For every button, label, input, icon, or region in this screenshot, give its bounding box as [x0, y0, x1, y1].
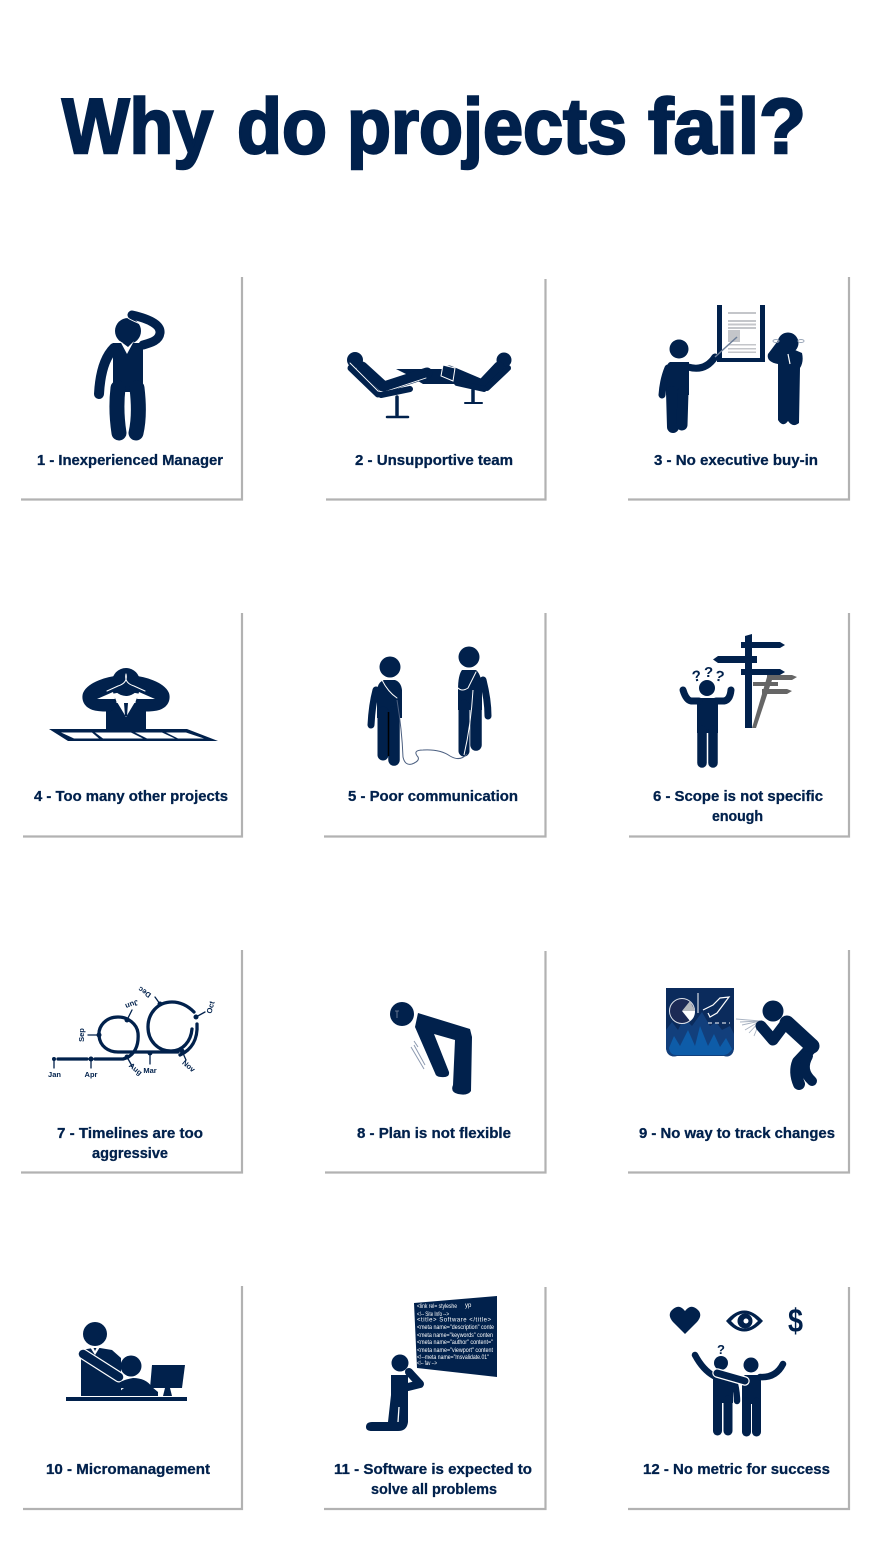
- icon: person kneeling before code screen: <!--meta name="msvalidate.01": [417, 1355, 489, 1361]
- icon: person kneeling before code screen: [366, 1296, 497, 1431]
- title: [62, 82, 806, 170]
- icon: looping timeline: Apr: [85, 1070, 98, 1079]
- label: 7 - Timelines are too: [57, 1125, 203, 1142]
- title: Why: [62, 82, 213, 170]
- icon: confused person at signpost: [683, 634, 797, 763]
- icon: person overwhelmed at desk: [49, 668, 218, 741]
- label: solve all problems: [371, 1481, 497, 1498]
- icon: dollar sign: $: [788, 1302, 803, 1339]
- icon: manager over shoulder of worker: [66, 1322, 187, 1401]
- icon: two people with arms up: ?: [717, 1342, 725, 1357]
- panel: 11 software expected to solve all problems: [324, 1287, 546, 1509]
- panel: 3 no executive buy-in: [628, 277, 849, 500]
- icon: person kneeling before code screen: <!-- fav -->: [417, 1361, 437, 1367]
- panel: 1 inexperienced manager: [21, 277, 242, 500]
- icon: two people reclining at a table: [347, 352, 512, 417]
- label: 12 - No metric for success: [643, 1461, 830, 1478]
- panel: 9 no way to track changes: [628, 950, 849, 1172]
- icon: two people with arms up: [695, 1342, 783, 1432]
- icon: looping timeline: Aug: [127, 1061, 144, 1077]
- icon: looping timeline: [48, 984, 217, 1079]
- icon: confused person at signpost: ?: [704, 664, 713, 681]
- icon: burning dashboard and coughing person: [666, 988, 812, 1084]
- icon: looping timeline: Jan: [48, 1070, 61, 1079]
- label: aggressive: [92, 1145, 168, 1162]
- icon: presenter showing a document: [662, 305, 804, 427]
- icon: person kneeling before code screen: <meta name="keywords" conten: [417, 1333, 493, 1339]
- label: [334, 1461, 532, 1498]
- panel: 7 timelines too aggressive: [21, 950, 242, 1172]
- label: 1 - Inexperienced Manager: [37, 452, 223, 469]
- icon: eye: [726, 1310, 763, 1332]
- label: 3 - No executive buy-in: [654, 452, 818, 469]
- icon: looping timeline: Sep: [77, 1028, 86, 1042]
- icon: person kneeling before code screen: yp: [465, 1303, 472, 1309]
- icon: person kneeling before code screen: <!-- Site Info -->: [417, 1312, 449, 1318]
- panel: 8 plan is not flexible: [325, 951, 546, 1172]
- icon: looping timeline: Nov: [180, 1058, 198, 1075]
- icon: looping timeline: Jun: [124, 998, 140, 1011]
- title: do: [237, 82, 327, 170]
- icon: confused manager: [99, 315, 160, 433]
- label: 4 - Too many other projects: [34, 788, 228, 805]
- label: 11 - Software is expected to: [334, 1461, 532, 1478]
- label: 6 - Scope is not specific: [653, 788, 823, 805]
- icon: person bending over: [390, 1002, 472, 1095]
- title: projects: [347, 82, 627, 170]
- icon: person kneeling before code screen: <meta name="author" content=": [417, 1340, 493, 1346]
- label: [653, 788, 823, 825]
- panel: 10 micromanagement: [23, 1286, 242, 1509]
- icon: heart: [670, 1307, 700, 1334]
- icon: person kneeling before code screen: <meta name="viewport" content: [417, 1348, 493, 1354]
- label: 2 - Unsupportive team: [355, 452, 513, 469]
- label: 9 - No way to track changes: [639, 1125, 835, 1142]
- title: fail?: [648, 82, 806, 170]
- icon: looping timeline: Oct: [205, 1000, 217, 1015]
- label: 8 - Plan is not flexible: [357, 1125, 511, 1142]
- icon: two people with tin-can phone: [371, 646, 488, 764]
- label: [57, 1125, 203, 1162]
- icon: confused person at signpost: ?: [713, 667, 726, 686]
- label: enough: [712, 808, 763, 825]
- icon: person kneeling before code screen: <meta name="description" conte: [417, 1325, 495, 1331]
- icon: looping timeline: Dec: [136, 984, 153, 1000]
- panel: 4 too many other projects: [23, 613, 242, 836]
- icon: looping timeline: Mar: [143, 1066, 157, 1075]
- label: 5 - Poor communication: [348, 788, 518, 805]
- icon: confused person at signpost: ?: [691, 667, 703, 686]
- icon: person kneeling before code screen: <link rel= styleshe: [417, 1304, 458, 1310]
- panel: 6 scope is not specific enough: [629, 613, 849, 836]
- icon: person kneeling before code screen: <title> Software </title>: [417, 1318, 491, 1324]
- label: 10 - Micromanagement: [46, 1461, 210, 1478]
- panel: 2 unsupportive team: [326, 279, 546, 500]
- panel: 5 poor communication: [324, 613, 546, 836]
- panel: 12 no metric for success: [628, 1287, 849, 1509]
